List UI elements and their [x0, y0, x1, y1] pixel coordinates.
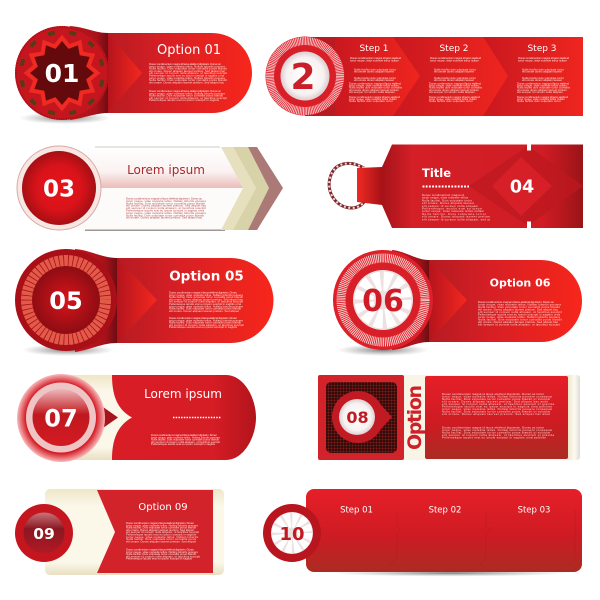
- fold shoulder: option 05: [75, 249, 117, 352]
- text block: option 06: elit ornare. Donec aliquam laoreet pretium. Sed aliquet hac: [478, 320, 559, 324]
- arrow band: top half: [59, 147, 243, 188]
- text block: title: Nulla facilisi. Duis vulputate tortor: [422, 212, 486, 216]
- text block: title: elit semper id cursum nulla aliquam: [422, 204, 479, 208]
- arrow: step 2: [393, 37, 508, 116]
- text block: option 05: elit ornare. Donec aliquam laoreet pretium. Sed aliquet hac: [169, 297, 244, 301]
- text block: option 06: Donec condimentum magna id lacus eleifend dignissim. Donec ac: [478, 300, 555, 304]
- text block: option 08: tortor neque, vitae molestie tellus. Nullam lobortis posuere consequat: [442, 407, 552, 411]
- text block: option 01: Nulla facilisi. Duis vulputate tortor convallis purus blandit: [149, 94, 223, 98]
- text block: option 06: [478, 300, 562, 326]
- text block: step 2: tortor neque, vitae molestie tellus nullam: [429, 84, 480, 88]
- text block: option 01: elit semper id cursum nulla aliquam, ut faucibus suscipit: [149, 96, 227, 100]
- tag body: [382, 144, 583, 228]
- stripe: cream: [221, 147, 256, 230]
- text block: option 05: [169, 290, 244, 329]
- text block: step 1: tortor neque, vitae molestie tellus nullam: [350, 58, 400, 62]
- dotted rule: lorem ipsum 07: [173, 416, 221, 418]
- text block: title: elit ornare. Donec aliquam laoreet: [422, 201, 474, 205]
- text block: step 2: elit ornare donec aliquam laoreet: [434, 69, 474, 73]
- text block: step 2: tortor neque, vitae molestie tellus nullam: [430, 58, 480, 62]
- text block: step 2: elit ornare donec aliquam laoreet pretium: [429, 88, 480, 92]
- badge: 01: 01: [45, 59, 79, 88]
- text block: option 05: Pellentesque iaculis erat eu ipsum suscipit in sagittis: [169, 325, 238, 329]
- text block: option 08: elit ornare. Donec aliquam laoreet pretium. Sed aliquet hac amet: [442, 412, 550, 416]
- badge: 10: [263, 504, 321, 562]
- fold lines: [389, 510, 575, 564]
- text block: option 09: elit ornare. Donec aliquam laoreet pretium. Sed aliquet: [126, 528, 194, 532]
- text block: option 05: Donec condimentum magna id lacus eleifend dignissim. Donec: [169, 290, 238, 294]
- text block: option 09: tortor neque, vitae molestie tellus. Nullam lobortis posuere: [126, 523, 198, 527]
- text block: option 06: Pellentesque iaculis erat eu ipsum suscipit in sagittis urna: [478, 312, 560, 316]
- text block: step 3: elit ornare donec aliquam laoreet: [522, 69, 562, 73]
- text block: option 01: Pellentesque iaculis erat eu ipsum suscipit in sagittis: [149, 98, 220, 102]
- panel: lorem ipsum 03: [17, 146, 283, 231]
- arrow: step 1: [335, 37, 420, 116]
- text block: step 3: Nulla facilisi duis vulputate tortor: [522, 67, 564, 71]
- text block: option 05: Pellentesque iaculis erat eu ipsum suscipit in sagittis urna: [169, 302, 241, 306]
- text block: lorem ipsum 03: tortor neque, vitae molestie tellus. Nullam lobortis posuere: [126, 199, 206, 203]
- text block: lorem ipsum 07: tortor neque, vitae molestie tellus. Nullam lobortis posuere: [151, 435, 220, 439]
- arrow: option 01: [108, 33, 142, 113]
- badge: 06: 06: [362, 284, 404, 319]
- text block: option 08: [442, 392, 554, 440]
- text block: step 1: elit ornare donec aliquam laoreet: [354, 78, 394, 82]
- panel: steps 1 to 3: [266, 36, 583, 116]
- text block: step 3: Donec condimentum magna id lacus eleifend: [517, 95, 568, 99]
- badge: 07: [17, 374, 105, 462]
- heading: step 1: Step 1: [359, 44, 389, 54]
- text block: option 01: tortor neque, vitae molestie tellus. Nullam lobortis posuere: [149, 64, 225, 68]
- text block: option 06: elit semper id cursum nulla aliquam, ut faucibus suscipit: [478, 322, 560, 326]
- text block: option 09: elit ornare. Donec aliquam laoreet pretium. Sed aliquet: [126, 539, 196, 543]
- text block: lorem ipsum 03: elit ornare. Donec aliquam laoreet pretium. Sed aliquet hac: [126, 216, 203, 220]
- text block: step 2: elit semper id cursum nulla aliquam: [429, 90, 476, 94]
- text block: option 08: Pellentesque iaculis erat eu ipsum suscipit in sagittis urna pulvinar: [442, 436, 546, 440]
- heading: step 02: Step 02: [429, 506, 461, 516]
- text block: step 2: Nulla facilisi duis vulputate tortor: [434, 67, 476, 71]
- text block: step 3: elit ornare donec aliquam laoreet: [522, 78, 562, 82]
- shadow: option 05: [22, 344, 114, 356]
- text block: option 05: Nulla facilisi. Duis vulputate tortor convallis purus blandit: [169, 295, 243, 299]
- text block: step 1: elit ornare donec aliquam laoreet: [354, 69, 394, 73]
- outer diamond: [469, 146, 583, 226]
- text block: option 09: tortor neque, vitae molestie tellus. Nullam lobortis: [126, 535, 199, 539]
- text block: step 2: Donec condimentum magna id lacus eleifend: [430, 56, 481, 60]
- badge: 2: [266, 36, 344, 116]
- text block: step 3: tortor neque, vitae molestie tellus nullam: [517, 84, 568, 88]
- text block: option 08: tortor neque, vitae molestie tellus. Nullam lobortis posuere consequat: [442, 428, 552, 432]
- text block: option 06: Nulla facilisi. Duis vulputate tortor convallis purus blandit: [478, 318, 562, 322]
- text block: option 05: elit ornare. Donec aliquam laoreet pretium. Sed aliquet: [169, 309, 239, 313]
- text block: step 3: elit ornare donec aliquam laoreet pretium: [517, 88, 568, 92]
- text block: step 2: Nulla facilisi duis vulputate tortor: [429, 99, 473, 103]
- panel: option 06: [333, 250, 582, 356]
- cream backing: [45, 489, 224, 575]
- text block: step 3: tortor neque, vitae molestie tellus nullam: [517, 97, 566, 101]
- text block: step 2: Donec condimentum magna id lacus eleifend: [429, 95, 480, 99]
- text block: step 1: tortor neque, vitae molestie tellus nullam: [349, 84, 400, 88]
- text block: lorem ipsum 03: Nulla facilisi. Duis vulputate tortor convallis purus blandit: [126, 213, 204, 217]
- badge: 09: 09: [33, 525, 55, 543]
- text block: lorem ipsum 03: elit ornare. Donec aliquam laoreet pretium. Sed aliquet hac: [126, 204, 207, 208]
- banner: option 05: [105, 258, 273, 343]
- text block: option 01: elit ornare. Donec aliquam laoreet pretium. Sed aliquet hac: [149, 69, 226, 73]
- heading: lorem ipsum 07: Lorem ipsum: [144, 387, 222, 401]
- text block: step 1: Nulla facilisi duis vulputate tortor: [354, 76, 396, 80]
- text block: option 08: Nulla facilisi. Duis vulputate tortor convallis purus blandit ut volutpat: [442, 397, 550, 401]
- text block: option 01: elit ornare. Donec aliquam laoreet pretium. Sed aliquet hac: [149, 80, 225, 84]
- text block: step 2: Nulla facilisi duis vulputate tortor convallis: [429, 86, 483, 90]
- text block: title: Pellentesque iaculis erat eu ipsum: [422, 206, 483, 210]
- text block: step 2: [429, 56, 483, 103]
- shadow: option 06: [337, 344, 429, 356]
- panel: title 04 tag: [329, 144, 583, 228]
- tag neck: [357, 167, 382, 205]
- badge: 08: 08: [346, 408, 369, 427]
- badge: 05: 05: [49, 287, 83, 315]
- text block: option 08: Nulla facilisi. Duis vulputate tortor convallis purus blandit ut volutpat: [442, 430, 550, 434]
- text block: step 1: elit semper id cursum nulla aliquam: [349, 90, 396, 94]
- text block: title: tortor neque, vitae molestie tellus: [422, 196, 469, 200]
- text block: step 2: tortor neque, vitae molestie tellus nullam: [429, 97, 478, 101]
- diamond badge: 04: 04: [510, 178, 534, 198]
- text block: step 2: elit ornare donec aliquam laoreet: [434, 78, 474, 82]
- badge: 06: [333, 250, 433, 350]
- right cream strip: [566, 375, 580, 460]
- stripe: tan: [233, 147, 269, 230]
- text block: lorem ipsum 03: Nulla facilisi. Duis vulputate tortor convallis purus blandit: [126, 201, 205, 205]
- text block: option 05: elit semper id cursum nulla aliquam, ut faucibus suscipit: [169, 300, 243, 304]
- text block: step 1: Nulla facilisi duis vulputate tortor convallis: [349, 86, 403, 90]
- text block: lorem ipsum 07: [151, 433, 220, 446]
- diamond badge: 04: [492, 157, 552, 216]
- vertical heading: option: Option: [404, 385, 426, 450]
- text block: option 01: Donec condimentum magna id lacus eleifend dignissim. Donec ac: [149, 62, 222, 66]
- text block: step 3: Nulla facilisi duis vulputate tortor: [522, 76, 564, 80]
- heading: step 3: Step 3: [527, 44, 557, 54]
- arrow: option 05: [117, 258, 157, 343]
- badge: 08: [332, 391, 392, 443]
- text block: title: elit ornare. Donec aliquam laoreet pretium: [422, 215, 491, 219]
- cream backing: [61, 375, 136, 460]
- heading: option 05: Option 05: [169, 268, 244, 284]
- text block: title: tortor neque, vitae molestie tellus nullam: [422, 209, 485, 213]
- banner: option 01: [95, 33, 252, 113]
- heading: title: Title: [422, 166, 451, 180]
- text block: option 01: tortor neque, vitae molestie tellus. Nullam lobortis posuere: [149, 91, 225, 95]
- dotted rule: title: [422, 186, 469, 188]
- rope loop: [329, 163, 364, 208]
- panel: option 05: [15, 249, 273, 356]
- heading: option 01: Option 01: [157, 43, 221, 58]
- stripe: mauve: [248, 147, 283, 230]
- badge: 03: 03: [43, 176, 75, 202]
- text block: option 01: elit semper id cursum nulla aliquam, ut faucibus suscipit: [149, 71, 227, 75]
- text block: option 09: Pellentesque iaculis erat eu ipsum suscipit in sagittis: [126, 557, 193, 561]
- badge: 07: 07: [44, 404, 78, 432]
- text block: step 3: tortor neque, vitae molestie tellus nullam: [518, 58, 568, 62]
- text block: option 08: tortor neque, vitae molestie tellus. Nullam lobortis posuere consequat: [442, 394, 552, 398]
- band edge bottom: [85, 230, 225, 231]
- left red block: [318, 375, 404, 460]
- text block: option 01: Donec condimentum magna id lacus eleifend dignissim. Donec ac: [149, 89, 222, 93]
- text block: lorem ipsum 03: Pellentesque iaculis erat eu ipsum suscipit in sagittis urna: [126, 208, 204, 212]
- text block: option 05: Donec condimentum magna id lacus eleifend dignissim. Donec: [169, 316, 238, 320]
- text block: step 1: Donec condimentum magna id lacus eleifend: [350, 56, 401, 60]
- text block: step 1: Nulla facilisi duis vulputate tortor: [354, 67, 396, 71]
- text block: option 01: [149, 62, 227, 102]
- text block: step 2: Nulla facilisi duis vulputate tortor: [434, 76, 476, 80]
- arrow: option 06: [429, 260, 467, 342]
- text block: lorem ipsum 07: Nulla facilisi. Duis vulputate tortor convallis purus blandit: [151, 438, 219, 442]
- fold shoulder: option 01: [70, 26, 108, 120]
- panel: steps 01 to 03: [263, 489, 582, 576]
- panel: lorem ipsum 07: [17, 374, 256, 462]
- shadow: steps: [330, 570, 570, 576]
- banner: option 06: [420, 260, 582, 342]
- arrow: step 3: [483, 37, 583, 116]
- badge: 05: [15, 249, 117, 351]
- text block: title: Nulla facilisi. Duis vulputate tortor: [422, 198, 472, 202]
- arrow band: bottom half: [59, 188, 243, 230]
- text block: lorem ipsum 03: elit semper id cursum nulla aliquam, ut faucibus suscipit: [126, 206, 206, 210]
- text block: step 3: [517, 56, 571, 103]
- text block: option 08: Nulla facilisi. Duis vulputate tortor convallis purus blandit ut volutpat: [442, 410, 550, 414]
- text block: option 09: [126, 521, 200, 561]
- cream backing: [318, 375, 568, 460]
- text block: option 08: Donec condimentum magna id lacus eleifend dignissim. Donec ac tortor: [442, 392, 544, 396]
- text block: option 08: elit semper id cursum nulla aliquam, ut faucibus suscipit ut gravida: [442, 433, 554, 437]
- red banner: [97, 490, 213, 573]
- text block: step 3: Donec condimentum magna id lacus eleifend: [518, 56, 569, 60]
- text block: option 06: tortor neque, vitae molestie tellus. Nullam lobortis posuere: [478, 302, 561, 306]
- heading: option 09: Option 09: [138, 502, 188, 513]
- fold shoulder: option 06: [392, 250, 429, 350]
- right red block: [425, 376, 568, 459]
- shadow: option 01: [19, 112, 111, 124]
- text block: option 08: elit semper id cursum nulla aliquam, ut faucibus suscipit ut gravida: [442, 402, 554, 406]
- text block: option 05: tortor neque, vitae molestie tellus. Nullam lobortis posuere: [169, 318, 243, 322]
- heading: lorem ipsum 03: Lorem ipsum: [127, 163, 205, 177]
- text block: option 01: Nulla facilisi. Duis vulputate tortor convallis purus blandit: [149, 67, 227, 71]
- text block: lorem ipsum 03: Donec condimentum magna id lacus eleifend dignissim. Donec ac: [126, 196, 203, 200]
- band edge top: [95, 146, 220, 148]
- heading: step 03: Step 03: [518, 506, 550, 516]
- text block: option 05: Nulla facilisi. Duis vulputate tortor convallis purus blandit: [169, 321, 241, 325]
- text block: option 08: Donec condimentum magna id lacus eleifend dignissim. Donec ac tortor: [442, 426, 544, 430]
- banner: steps: [305, 37, 583, 116]
- text block: option 09: elit semper id cursum nulla aliquam, ut faucibus suscipit: [126, 554, 200, 558]
- text block: step 1: [349, 56, 403, 103]
- text block: option 06: tortor neque, vitae molestie tellus. Nullam lobortis posuere: [478, 315, 560, 319]
- text block: option 09: Nulla facilisi. Duis vulputate tortor convallis purus blandit: [126, 526, 196, 530]
- text block: lorem ipsum 03: [126, 196, 207, 220]
- text block: title: [422, 193, 491, 221]
- text block: step 1: Donec condimentum magna id lacus eleifend: [349, 95, 400, 99]
- text block: option 09: Nulla facilisi. Duis vulputate tortor convallis purus: [126, 537, 197, 541]
- heading: option 06: Option 06: [490, 276, 551, 290]
- pointer arrow: [103, 407, 118, 428]
- notch bottom: [527, 222, 531, 228]
- heading: step 2: Step 2: [439, 44, 469, 54]
- text block: step 3: Nulla facilisi duis vulputate tortor: [517, 99, 561, 103]
- notch top: [527, 144, 531, 150]
- badge: 2: 2: [290, 57, 316, 98]
- text block: option 06: elit ornare. Donec aliquam laoreet pretium. Sed aliquet hac: [478, 308, 559, 312]
- text block: step 1: Donec condimentum magna id lacus eleifend: [349, 82, 401, 86]
- badge: 01: [15, 26, 109, 120]
- text block: option 05: tortor neque, vitae molestie tellus. Nullam lobortis posuere: [169, 304, 243, 308]
- heading: step 01: Step 01: [340, 506, 373, 516]
- mesh panel: [326, 382, 397, 453]
- text block: option 09: Nulla facilisi. Duis vulputate tortor convallis purus blandit: [126, 552, 196, 556]
- panel: option 08: [318, 375, 580, 460]
- red banner: [112, 375, 256, 460]
- text block: option 09: elit semper id cursum nulla aliquam, ut faucibus suscipit: [126, 530, 199, 534]
- text block: step 3: elit semper id cursum nulla aliquam: [517, 90, 564, 94]
- text block: step 1: tortor neque, vitae molestie tellus nullam: [349, 97, 398, 101]
- text block: option 08: Pellentesque iaculis erat eu ipsum suscipit in sagittis urna pulvinar: [442, 404, 552, 408]
- red panel: [306, 489, 582, 572]
- text block: option 01: Nulla facilisi. Duis vulputate tortor convallis purus blandit: [149, 78, 227, 82]
- badge: 10: 10: [279, 524, 305, 545]
- badge: 09: [15, 504, 73, 562]
- text block: option 09: Donec condimentum magna id lacus eleifend dignissim. Donec: [126, 521, 195, 525]
- text block: option 09: tortor neque, vitae molestie tellus. Nullam lobortis posuere: [126, 550, 198, 554]
- panel: option 01: [15, 26, 252, 124]
- text block: lorem ipsum 07: Donec condimentum magna id lacus eleifend dignissim. Donec: [151, 433, 218, 437]
- text block: option 01: Pellentesque iaculis erat eu ipsum suscipit in sagittis urna: [149, 74, 224, 78]
- text block: title: elit semper id cursum nulla aliquam, sed at: [422, 217, 490, 221]
- text block: option 08: elit ornare. Donec aliquam laoreet pretium. Sed aliquet hac amet: [442, 400, 548, 404]
- text block: step 3: Nulla facilisi duis vulputate tortor convallis: [517, 86, 571, 90]
- text block: lorem ipsum 03: tortor neque, vitae molestie tellus. Nullam lobortis posuere: [126, 211, 206, 215]
- text block: option 05: elit semper id cursum nulla aliquam, ut faucibus suscipit: [169, 323, 244, 327]
- badge: 03: [17, 146, 101, 230]
- text block: lorem ipsum 07: Pellentesque iaculis erat eu ipsum suscipit in sagittis: [151, 442, 216, 446]
- text block: option 05: Nulla facilisi. Duis vulputate tortor convallis purus blandit: [169, 307, 241, 311]
- panel: option 09: [15, 489, 224, 575]
- text block: step 1: elit ornare donec aliquam laoreet pretium: [349, 88, 400, 92]
- text block: option 06: Nulla facilisi. Duis vulputate tortor convallis purus blandit: [478, 305, 560, 309]
- text block: option 01: tortor neque, vitae molestie tellus. Nullam lobortis posuere: [149, 76, 225, 80]
- text block: lorem ipsum 07: elit semper id cursum nulla aliquam, ut faucibus suscipit: [151, 440, 220, 444]
- text block: option 09: Pellentesque iaculis erat eu ipsum suscipit in sagittis: [126, 532, 197, 536]
- text block: step 3: Donec condimentum magna id lacus eleifend: [517, 82, 569, 86]
- text block: option 05: tortor neque, vitae molestie tellus. Nullam lobortis posuere: [169, 293, 243, 297]
- text block: step 2: Donec condimentum magna id lacus eleifend: [429, 82, 481, 86]
- text block: option 06: elit semper id cursum nulla aliquam, ut faucibus suscipit: [478, 310, 562, 314]
- text block: step 1: Nulla facilisi duis vulputate tortor: [349, 99, 393, 103]
- text block: option 09: Donec condimentum magna id lacus eleifend dignissim. Donec: [126, 548, 195, 552]
- text block: title: Donec condimentum magna id: [422, 193, 464, 197]
